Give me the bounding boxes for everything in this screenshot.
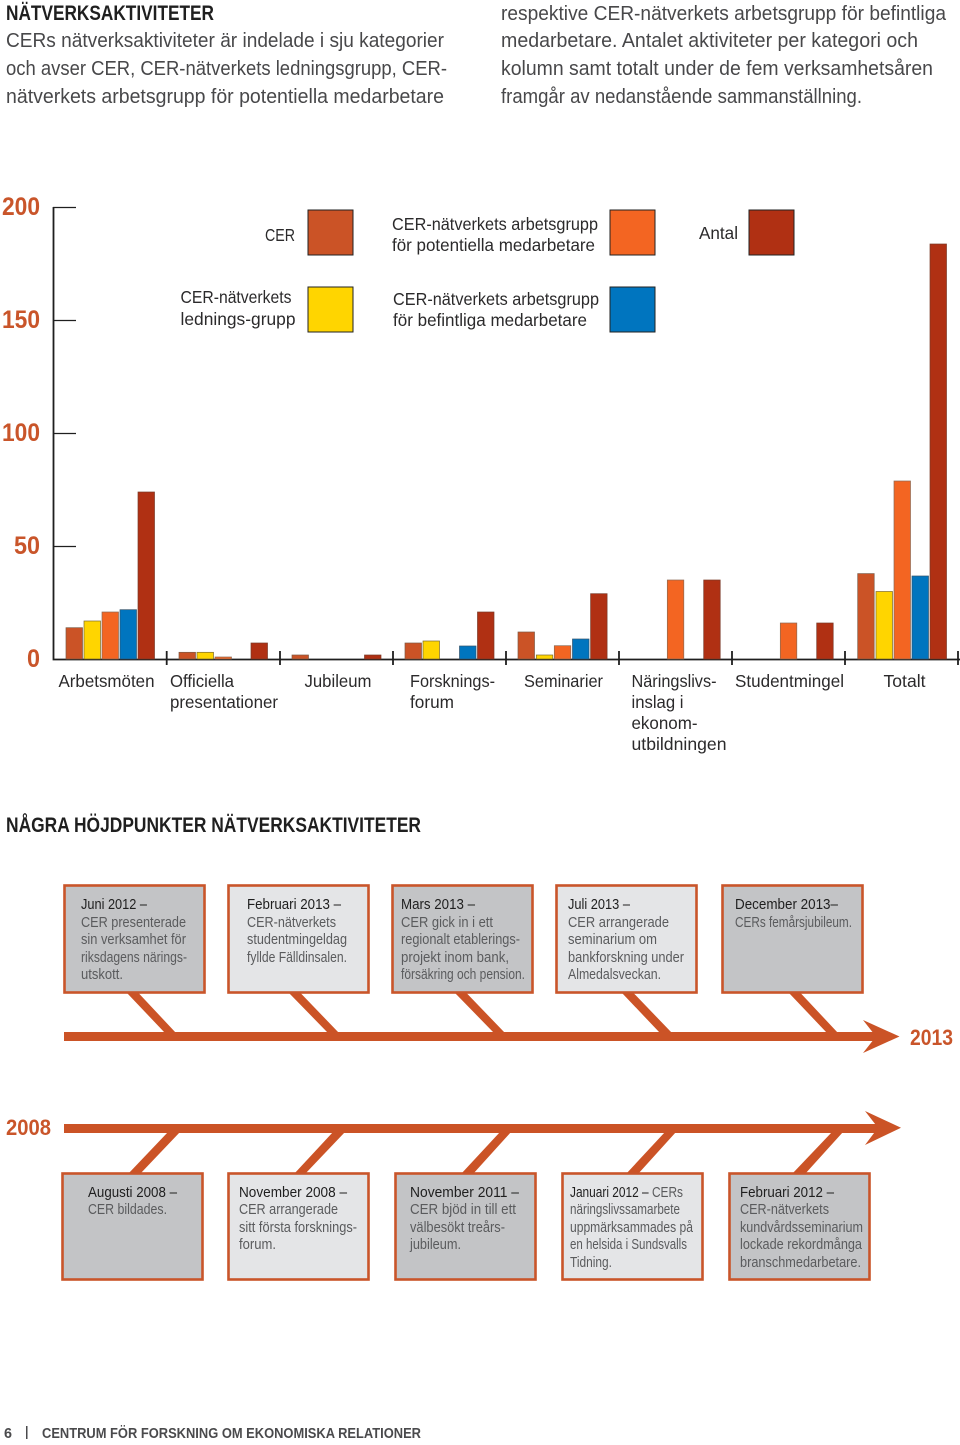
callout: Februari 2012: lockade rekordmånga: [740, 1237, 863, 1253]
callout: November 2011: välbesökt treårs-: [410, 1220, 505, 1236]
callout: November 2008: CER arrangerade: [239, 1202, 338, 1218]
callout: December 2013: CERs femårsjubileum.: [735, 915, 852, 931]
callout: Mars 2013: regionalt etablerings-: [401, 932, 520, 948]
callout: Juli 2013: Almedalsveckan.: [568, 967, 661, 983]
bars: Forskningsforum: [405, 612, 494, 659]
callout: Februari 2012: Februari 2012 –: [740, 1185, 835, 1201]
callout: Januari 2012: [562, 1174, 702, 1280]
bar chart: activities per category: [2, 193, 960, 754]
callout: Januari 2012: uppmärksammades på: [570, 1220, 694, 1236]
callout: Juli 2013: [556, 886, 696, 992]
text block: intro right column: kolumn samt totalt under de fem verksamhetsåren: [501, 58, 933, 80]
callout: Mars 2013: [392, 886, 532, 992]
callout: Juli 2013: Juli 2013 –: [568, 897, 631, 913]
bars: Näringslivsinslag i ekonomutbildningen: [667, 580, 720, 659]
callout: Juni 2012: utskott.: [81, 967, 123, 983]
callout: Juli 2013: bankforskning under: [568, 950, 684, 966]
legend: CER-nätverkets arbetsgrupp: [393, 289, 599, 309]
callout: Augusti 2008: [62, 1174, 202, 1280]
callout: November 2011: November 2011 –: [410, 1185, 520, 1201]
y axis labels: 200: [2, 193, 40, 221]
category labels: Arbetsmöten: [58, 671, 154, 691]
bars: Jubileum: [292, 655, 381, 659]
callout: Januari 2012: Januari 2012 – CERs: [570, 1185, 683, 1201]
callout: December 2013: December 2013–: [735, 897, 839, 913]
y axis labels: 50: [14, 532, 40, 560]
callout: November 2011: jubileum.: [409, 1237, 461, 1253]
text block: intro left column: [6, 2, 447, 108]
text block: intro left column: nätverkets arbetsgrupp för potentiella medarbetare: [6, 86, 444, 108]
callout: Mars 2013: Mars 2013 –: [401, 897, 476, 913]
bars: Arbetsmöten: [66, 492, 154, 659]
callout: Februari 2012: CER-nätverkets: [740, 1202, 829, 1218]
legend: för befintliga medarbetare: [393, 310, 587, 330]
callout: November 2008: sitt första forsknings-: [239, 1220, 357, 1236]
callout: Februari 2013: Februari 2013 –: [247, 897, 342, 913]
y axis labels: 0: [27, 645, 40, 673]
label: 2008: 2008: [6, 1115, 51, 1140]
category labels: Näringslivs-: [632, 671, 717, 691]
category labels: [58, 671, 926, 754]
heading: Nätverksaktiviteter: NÄTVERKSAKTIVITETER: [6, 2, 214, 25]
category labels: Jubileum: [304, 671, 372, 691]
category labels: Studentmingel: [735, 671, 844, 691]
legend: lednings-grupp: [180, 309, 296, 329]
bars: Studentmingel: [780, 623, 833, 659]
callout: Februari 2013: CER-nätverkets: [247, 915, 336, 931]
category labels: Forsknings-: [410, 671, 495, 691]
bars: Totalt: [858, 244, 946, 659]
footer: page number and organisation: CENTRUM FÖR FORSKNING OM EKONOMISKA RELATIONER: [42, 1425, 421, 1442]
text block: intro left column: och avser CER, CER-nätverkets ledningsgrupp, CER-: [6, 58, 447, 80]
category labels: Officiella: [170, 671, 234, 691]
category labels: Totalt: [884, 671, 926, 691]
callout: Februari 2013: fyllde Fälldinsalen.: [247, 950, 347, 966]
callout: December 2013: [722, 886, 862, 992]
text block: intro left column: CERs nätverksaktiviteter är indelade i sju kategorier: [6, 30, 444, 52]
y axis labels: 150: [2, 306, 40, 334]
chart axes: [53, 207, 960, 665]
text block: intro right column: [501, 3, 947, 108]
callout: Mars 2013: projekt inom bank,: [401, 950, 509, 966]
callout: Augusti 2008: CER bildades.: [88, 1202, 167, 1218]
callout: Juli 2013: CER arrangerade: [568, 915, 669, 931]
callout: Augusti 2008: Augusti 2008 –: [88, 1185, 178, 1201]
callout: Januari 2012: näringslivssamarbete: [570, 1202, 680, 1218]
callout: Juni 2012: Juni 2012 –: [81, 897, 148, 913]
legend: för potentiella medarbetare: [392, 235, 595, 255]
heading: Några höjdpunkter: NÅGRA HÖJDPUNKTER NÄTVERKSAKTIVITETER: [6, 813, 421, 837]
bars: Officiella presentationer: [179, 643, 268, 659]
callout: Juni 2012: [64, 886, 204, 992]
text block: intro right column: respektive CER-nätverkets arbetsgrupp för befintliga: [501, 3, 947, 25]
legend: Antal: [699, 223, 738, 243]
category labels: ekonom-: [632, 713, 698, 733]
category labels: inslag i: [632, 692, 684, 712]
callout: November 2008: [228, 1174, 368, 1280]
category labels: forum: [410, 692, 454, 712]
timeline arrow: lower: [64, 1111, 901, 1174]
callout: November 2011: [396, 1174, 536, 1280]
timeline arrow: upper: [64, 993, 900, 1053]
legend: CER-nätverkets: [180, 287, 292, 307]
y axis labels: [2, 193, 40, 673]
legend: CER: [265, 225, 295, 245]
callout: Juli 2013: seminarium om: [568, 932, 657, 948]
category labels: utbildningen: [632, 734, 726, 754]
callout: Juni 2012: sin verksamhet för: [81, 932, 186, 948]
legend: CER-nätverkets arbetsgrupp: [392, 214, 598, 234]
label: 2013: 2013: [910, 1025, 953, 1050]
callout: Februari 2013: studentmingeldag: [247, 932, 347, 948]
bars: Seminarier: [518, 594, 607, 659]
category labels: presentationer: [170, 692, 278, 712]
text block: intro right column: framgår av nedanstående sammanställning.: [501, 86, 862, 108]
legend: [180, 210, 794, 332]
callout: Mars 2013: försäkring och pension.: [401, 967, 525, 983]
callout: Januari 2012: en helsida i Sundsvalls: [570, 1237, 687, 1253]
callout: Juni 2012: riksdagens närings-: [81, 950, 187, 966]
category labels: Seminarier: [524, 671, 603, 691]
callout: Februari 2012: [730, 1174, 870, 1280]
callout: Februari 2012: kundvårdsseminarium: [740, 1220, 863, 1236]
callout: November 2008: forum.: [239, 1237, 276, 1253]
y axis labels: 100: [2, 419, 40, 447]
callout: Juni 2012: CER presenterade: [81, 915, 186, 931]
callout: Mars 2013: CER gick in i ett: [401, 915, 493, 931]
footer: page number and organisation: 6: [4, 1426, 12, 1442]
text block: intro right column: medarbetare. Antalet aktiviteter per kategori och: [501, 30, 918, 52]
callout: Januari 2012: Tidning.: [570, 1255, 612, 1271]
callout: November 2008: November 2008 –: [239, 1185, 348, 1201]
callout: Februari 2012: branschmedarbetare.: [740, 1255, 861, 1271]
callout: Februari 2013: [228, 886, 368, 992]
callout: November 2011: CER bjöd in till ett: [410, 1202, 516, 1218]
